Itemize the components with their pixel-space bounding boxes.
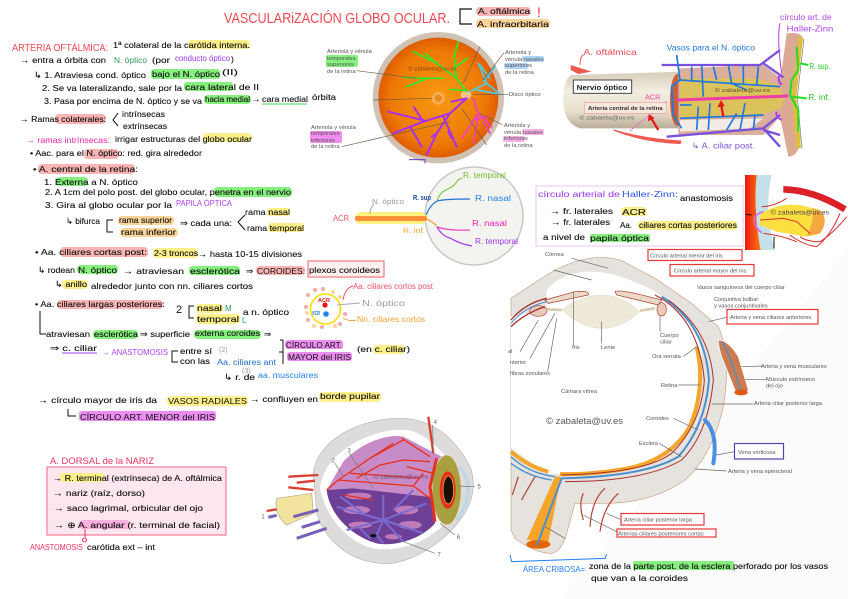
label: nasales superiores: de la retina [505,70,534,76]
diagram: ramas de la arteria central de la retina: R. nasal [472,219,507,228]
diagram: nervio óptico: Haller-Zinn [787,25,833,34]
text block: arteria oftálmica: → entra a órbita con [20,55,106,65]
vessels: blue vasos para el nervio [672,55,780,130]
text block: arterias ciliares largas posteriores: CÍRCULO ART. [286,341,342,350]
text block: vasos radiales: → confluyen en [250,394,318,404]
labels: partes del ojo: Esclera [639,441,659,447]
diagram: corte sagital del ojo [508,250,827,562]
label: nervio óptico [573,80,632,93]
diagram: detalle del círculo de Haller-Zinn [745,175,847,250]
text block: ramas intrínsecas y arteria central de la retina: 2. A 1cm del polo post. del globo ocular, penetra en el nervio [45,187,291,197]
diagram: ramas de la arteria central de la retina [333,167,523,265]
text block: arterias ciliares largas posteriores: • Aa. ciliares largas posteriores: [35,299,165,309]
text block: arterias ciliares largas posteriores: atraviesan [46,329,90,339]
text block: arteria dorsal de la nariz [30,456,226,552]
labels: partes del ojo: Retina [661,383,678,389]
text block: arteria oftálmica: órbita [312,92,336,102]
callout: círculo arterial menor del iris: Círculo arterial menor del iris [650,254,723,260]
labels: partes del ojo: fibras zonulares [510,371,550,377]
text block: arterias ciliares largas posteriores: esclerótica [94,329,138,339]
label: nasales inferiores: inferiores [504,136,528,142]
label: temporales inferiores: Arteriola y vénula [311,125,357,131]
text block: arterias ciliares largas posteriores: temporal [197,314,239,324]
diagram: globo ocular en corte: 1 [261,514,265,520]
text block: arteria dorsal de la nariz: → R. terminal (extrínseca) de A. oftálmica [53,473,222,483]
text block: arterias ciliares largas posteriores: externa coroides [195,328,260,338]
labels: partes del ojo: Arteria y vena epiescleral [728,469,792,475]
callout: arterias ciliares posteriores cortas [617,529,716,538]
labels: partes del ojo: Conjuntiva bulbar [714,297,758,303]
label: temporales inferiores [310,125,357,150]
diagram: corte del nervio óptico: N. óptico [362,298,405,308]
text block: arterias ciliares cortas posteriores: ↳ anillo [55,279,87,289]
text block: ramas intrínsecas y arteria central de la retina: 3. Gira al globo ocular por la [45,200,172,210]
text block: arterias ciliares largas posteriores: ⇒ [264,329,272,339]
diagram: nervio óptico [563,13,833,157]
text block: arteria oftálmica: (II) [222,67,238,77]
text block: arteria oftálmica: cara medial [262,94,308,104]
text block: arteria oftálmica: ↳ 1. Atraviesa cond. óptico [34,70,146,80]
text block: ramas intrínsecas y arteria central de la retina: ⇒ cada una: [180,218,232,228]
diagram: corte del nervio óptico [304,282,434,329]
diagram: corte del nervio óptico: Aa. ciliares cortos post [353,282,434,291]
title: ! [537,4,541,20]
labels: partes del ojo: Córnea [545,252,564,258]
callout: círculo arterial mayor del iris [670,264,754,276]
panel: círculo arterial de Haller-Zinn: a nivel de [543,232,585,242]
diagram: nervio óptico: ↳ A. ciliar post. [692,141,755,150]
diagram: ramas de la arteria central de la retina: R. temporal [463,171,506,180]
text block: arterias ciliares cortas posteriores: ↳ rodean [38,265,75,275]
text block: arterias ciliares cortas posteriores: alrededor junto con nn. ciliares cortos [91,281,253,291]
vessels: oftálmica [571,65,682,144]
labels: partes del ojo: del ojo [766,384,783,390]
text block: arteria oftálmica: 3. Pasa por encima de N. óptico y se va [44,96,202,106]
text block: arterias ciliares largas posteriores: con las [180,356,210,366]
label: nervio óptico: Nervio óptico [577,83,628,92]
labels: partes del ojo: Lente [601,345,615,351]
diagram: globo ocular en corte [261,417,481,564]
text block: arteria oftálmica: ) [231,54,234,64]
text block: arteria oftálmica: bajo el N. óptico [152,69,220,79]
text block: arterias ciliares largas posteriores: entre sí [180,346,213,356]
diagram: nervio óptico: © zabaleta@uv.es [715,87,770,94]
label: nasales inferiores: de la retina [504,143,533,149]
diagram: ramas de la arteria central de la retina: ACR [333,214,349,223]
text block: arterias ciliares cortas posteriores [35,247,384,291]
text block: arterias ciliares cortas posteriores: ⇒ [246,266,254,276]
diagram: nervio óptico: A. oftálmica [583,47,637,57]
label: arteria central de la retina: Arteria central de la retina [588,106,663,112]
green retina vessels [790,47,808,132]
text block: arteria oftálmica: ARTERIA OFTÁLMICA: [12,41,108,54]
diagram: globo ocular en corte: 6 [457,535,461,541]
diagram: ramas de la arteria central de la retina: R. inf. [403,226,425,235]
text block: arteria oftálmica: conducto óptico [175,53,230,63]
diagram: ramas de la arteria central de la retina: R. nasal [475,194,511,203]
text block: arteria dorsal de la nariz: ANASTOMOSIS [30,543,83,552]
red arrows [651,104,723,130]
label: temporales superiores: superiores [327,62,354,68]
panel: círculo arterial de Haller-Zinn: ACR [622,207,646,217]
text block: arterias ciliares cortas posteriores: 2-3 troncos [154,248,198,258]
text block: ramas intrínsecas y arteria central de la retina [26,133,304,237]
label: nasales inferiores [503,123,544,149]
text block: arterias ciliares cortas posteriores: esclerótica [190,266,240,276]
text block: ramas colaterales: → Ramas colaterales: [20,114,106,124]
labels: partes del ojo: Coroides [646,416,669,422]
label: nasales inferiores: vénula nasales [504,130,543,136]
text block: ramas intrínsecas y arteria central de la retina: rama inferior [121,227,176,237]
panel: círculo arterial de Haller-Zinn: anastomosis [680,193,733,203]
callout: arterias ciliares posteriores cortas: Arterias ciliares posteriores cortas [618,532,704,538]
text block: arterias ciliares cortas posteriores: COROIDES: [257,266,305,276]
title [224,4,550,29]
diagram: nervio óptico: R. inf. [808,93,830,102]
diagram: ramas de la arteria central de la retina: R. temporal [475,237,518,246]
callout: arteria ciliar posterior larga: Arteria ciliar posterior larga [624,518,693,524]
text block: ramas intrínsecas y arteria central de la retina: irrigar estructuras del globo ocular [115,134,252,144]
text block: ramas intrínsecas y arteria central de la retina: 1. Externa a N. óptico [44,177,138,187]
text block: arteria oftálmica: (por [152,55,170,65]
diagram: globo ocular en corte: 3 [347,448,351,454]
text block: área cribosa [523,561,828,583]
text block: arterias ciliares largas posteriores: ⇒ c. ciliar [50,343,97,353]
text block: arterias ciliares largas posteriores: → ANASTOMOSIS [102,348,168,357]
callout: vena vorticosa [734,444,784,459]
panel: círculo arterial de Haller-Zinn: ciliares cortas posteriores [639,220,737,230]
text block: arteria dorsal de la nariz: → ⊕ A. angular (r. terminal de facial) [54,520,220,530]
diagram: globo ocular en corte: 5 [477,485,481,491]
label: nasales superiores: superiores [505,63,532,69]
text block: arterias ciliares cortas posteriores: → atraviesan [123,266,184,276]
text block: arterias ciliares largas posteriores: Aa. ciliares ant [217,358,277,367]
callout: círculo arterial menor del iris [648,250,742,260]
text block: arterias ciliares largas posteriores: 2 [176,304,182,316]
diagram: ramas de la arteria central de la retina: N. óptico [372,197,404,206]
text block: arteria dorsal de la nariz: carótida ext – int [87,542,156,552]
text block: arterias ciliares cortas posteriores: → hasta 10-15 divisiones [198,249,302,259]
panel: círculo arterial de Haller-Zinn: → fr. laterales [550,206,613,216]
text block: ramas intrínsecas y arteria central de la retina: • Aac. para el N. óptico: red. gira alrededor [30,148,202,158]
callout: arteria y vena ciliares anteriores: Arteria y vena ciliares anteriores [730,315,811,321]
text block: arterias ciliares largas posteriores: a n. óptico [243,307,289,317]
text block: arteria dorsal de la nariz: → saco lagrimal, orbicular del ojo [54,503,203,513]
labels: partes del ojo: Cámara vítrea [561,389,598,395]
text block: arterias ciliares cortas posteriores: N. óptico [78,265,117,275]
text block: arterias ciliares largas posteriores: nasal [197,303,222,313]
labels: partes del ojo: Músculo extrínseco [766,377,815,383]
label: temporales superiores: temporales [327,56,356,62]
text block: arteria oftálmica: cara lateral de II [185,82,259,92]
text block: vasos radiales: → círculo mayor de iris da [38,395,157,405]
diagram: nervio óptico: círculo art. de [780,13,832,22]
title: A. infraorbitaria [477,19,549,29]
labels: partes del ojo: y vasos conjuntivales [714,304,768,310]
panel: círculo arterial de Haller-Zinn: papila óptica [590,233,649,243]
diagram: globo ocular en corte: 2 [332,458,336,464]
text block: arterias ciliares largas posteriores [35,299,410,382]
panel: círculo arterial de Haller-Zinn: círculo arterial de [538,189,620,199]
diagram: nervio óptico: Vasos para el N. óptico [667,43,755,53]
callout: vena vorticosa: Vena vorticosa [738,450,776,456]
text block: arterias ciliares largas posteriores: ↳ r. de [224,372,255,382]
text block: arterias ciliares cortas posteriores: • Aa. ciliares cortas post: [35,247,147,257]
retina band [511,347,700,474]
callout: arteria y vena ciliares anteriores [727,310,818,324]
text block: arterias ciliares largas posteriores: (2) [219,347,228,354]
diagram: nervio óptico: R. sup. [809,62,830,71]
vessel: arteria central [677,96,788,100]
text block: vasos radiales: borde pupilar [320,391,380,401]
label: temporales inferiores: temporales [311,131,340,137]
text block: arteria dorsal de la nariz: → nariz (raíz, dorso) [53,488,145,498]
diagram: nervio óptico: © zabaleta@uv.es [579,114,635,121]
callout: círculo arterial mayor del iris: Círculo arterial mayor del iris [674,268,747,274]
diagram: globo ocular en corte: © zabaleta@uv.es [373,473,429,480]
label: disco óptico: Disco óptico [509,92,541,98]
text block: arterias ciliares largas posteriores: aa. musculares [258,371,318,380]
label: temporales inferiores: inferiores [311,138,335,144]
panel: círculo arterial de Haller-Zinn: Aa. [620,220,632,230]
lens [562,295,640,328]
title: VASCULARiZACIÓN GLOBO OCULAR. [224,10,450,27]
text block: arterias ciliares largas posteriores: (en c. ciliar) [357,344,410,354]
labels: partes del ojo: Iris [572,345,580,351]
text block: arterias ciliares largas posteriores: ⇒ superficie [140,329,190,339]
diagram: corte del nervio óptico: VCR [312,311,320,317]
text block: vasos radiales: VASOS RADIALES [168,397,247,406]
vessels: purple ciliary [662,50,783,147]
text block: área cribosa: zona de la parte post. de la esclera perforado por los vasos [589,561,828,571]
text block: arteria oftálmica: hacia medial [205,94,250,104]
labels: partes del ojo: al [508,349,512,355]
diagram: globo ocular en corte: 4 [434,420,438,426]
labels: partes del ojo: ciliar [660,340,672,346]
labels: partes del ojo: nterior [510,360,526,366]
text block: arteria oftálmica: N. óptico [114,55,147,65]
title: A. oftálmica [478,6,530,16]
text block: arteria oftálmica: 2. Se va lateralizando, sale por la [42,83,182,93]
text block: área cribosa: ÁREA CRIBOSA= [523,564,585,574]
label: nasales superiores: vénula nasales [505,57,544,63]
diagram: detalle del círculo de Haller-Zinn: © zabaleta@uv.es [771,210,829,217]
callout: arteria ciliar posterior larga [621,514,704,525]
label: temporales superiores [326,49,373,75]
label: temporales inferiores: de la retina [311,144,340,150]
labels: partes del ojo [508,252,827,475]
labels: partes del ojo: Arteria y vena musculares [761,364,827,370]
cylinder: optic nerve [563,72,683,128]
text block: ramas intrínsecas y arteria central de la retina: • A. central de la retina: [33,164,138,174]
text block: arteria dorsal de la nariz: A. DORSAL de la NARIZ [50,456,155,466]
label: nasales superiores: Arteriola y [505,50,531,56]
text block: ramas colaterales [20,109,167,131]
diagram: corte del nervio óptico: Nn. ciliares cortos [357,315,425,324]
text block: ramas intrínsecas y arteria central de la retina: rama temporal [247,223,304,233]
diagram: fondo de ojo: © zabaleta@uv.es [408,66,457,73]
text block: arteria oftálmica: → [252,94,260,104]
diagram: corte del nervio óptico: ACR [318,298,330,304]
text block: arterias ciliares largas posteriores: L [242,316,247,325]
text block: área cribosa: que van a la coroides [591,573,688,583]
labels: partes del ojo: Cuerpo [660,333,679,339]
panel: círculo arterial de Haller-Zinn [536,186,743,246]
text block: arterias ciliares largas posteriores: (3) [242,368,251,375]
text block: ramas colaterales: intrínsecas [122,109,165,119]
text block: ramas intrínsecas y arteria central de la retina: ↳ bifurca [66,216,100,226]
label: temporales superiores: de la retina [327,69,356,75]
panel: círculo arterial de Haller-Zinn: Haller-Zinn: [622,189,678,199]
labels: partes del ojo: © zabaleta@uv.es [546,416,623,427]
diagram: fondo de ojo [310,32,544,163]
text block: ramas colaterales: extrínsecas [123,121,167,131]
labels: partes del ojo: Arteria ciliar posterior larga [754,401,823,407]
label: nasales superiores [504,50,544,76]
text block: vasos radiales: CÍRCULO ART. MENOR del IRIS [80,413,215,422]
diagram: ramas de la arteria central de la retina: R. sup [413,193,431,202]
text block: arteria oftálmica [12,40,336,106]
text block: arterias ciliares largas posteriores: MAYOR del IRIS [288,353,351,362]
label: nasales inferiores: Arteriola y [504,123,530,129]
panel: círculo arterial de Haller-Zinn: → fr. laterales [551,217,610,227]
text block: ramas intrínsecas y arteria central de la retina: rama superior [119,215,172,225]
text block: arteria oftálmica: 1ª colateral de la carótida interna. [113,40,250,50]
label: temporales superiores: Arteriola y vénula [327,49,373,55]
label: arteria central de la retina [584,103,667,113]
text block: ramas intrínsecas y arteria central de la retina: rama nasal [245,207,290,217]
text block: vasos radiales [38,391,381,422]
text block: arterias ciliares largas posteriores: M [225,304,232,313]
text block: ramas intrínsecas y arteria central de la retina: PAPILA ÓPTICA [176,199,233,208]
labels: partes del ojo: Vasos sanguíneos del cuerpo ciliar [697,285,785,291]
diagram: globo ocular en corte: 7 [437,552,441,558]
text block: arterias ciliares cortas posteriores: plexos coroideos [309,265,380,275]
labels: partes del ojo: Ora serrata [652,354,682,360]
diagram: nervio óptico: ACR [645,92,660,101]
text block: ramas intrínsecas y arteria central de la retina: → ramas intrínsecas: [26,135,110,145]
